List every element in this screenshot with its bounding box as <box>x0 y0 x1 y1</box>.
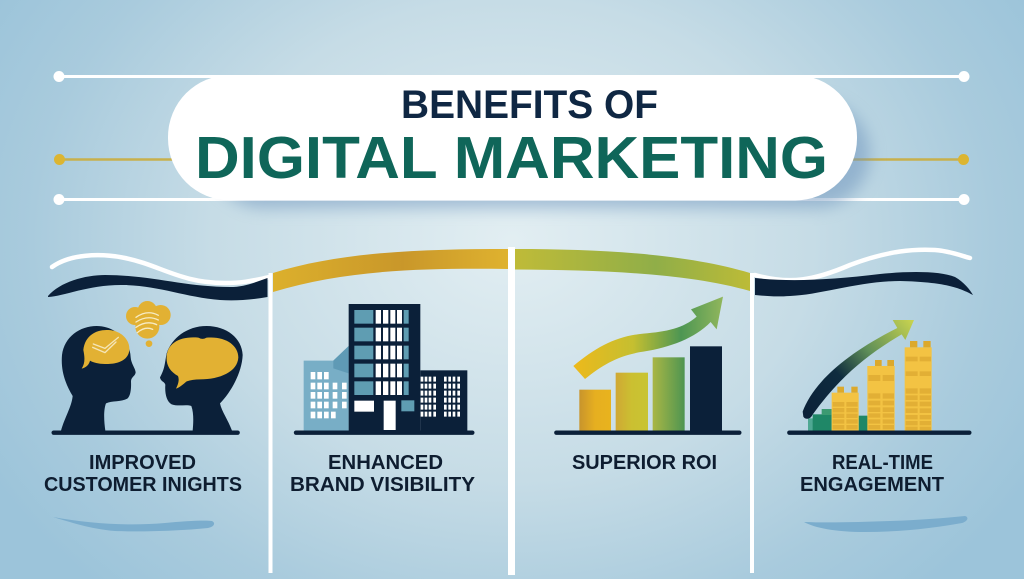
panel: improved customer insights icon <box>54 301 243 433</box>
title pill <box>168 75 857 200</box>
title pill shadow <box>210 100 870 208</box>
left head <box>61 326 136 431</box>
green arc band <box>515 249 750 291</box>
title line 1: BENEFITS OF <box>401 83 658 127</box>
tall navy tower <box>349 304 420 431</box>
label: improved customer insights <box>44 452 242 496</box>
column dividers <box>268 247 754 575</box>
gold arc band <box>273 249 508 292</box>
base line <box>556 426 739 439</box>
decorative line: middle gold <box>54 154 969 165</box>
title line 2: DIGITAL MARKETING <box>195 125 828 191</box>
swoosh: left <box>53 517 214 531</box>
label: superior ROI: SUPERIOR ROI <box>572 452 717 474</box>
decorative line: top white <box>54 71 970 82</box>
left speech bubble with check <box>82 330 129 369</box>
left pale building <box>304 346 349 431</box>
bar chart <box>579 346 722 431</box>
rising arrow <box>573 297 723 379</box>
right wave: white <box>755 250 970 280</box>
panel: real-time engagement icon <box>789 320 969 433</box>
right navy building <box>420 370 467 431</box>
green blocks <box>808 409 868 431</box>
panel: enhanced brand visibility icon <box>296 304 472 433</box>
label: real-time engagement <box>800 452 944 496</box>
decorative line: bottom white <box>54 194 970 205</box>
swoosh: right <box>804 516 967 532</box>
base line <box>789 426 969 439</box>
label: real-time engagement: ENGAGEMENT <box>800 474 944 496</box>
label: enhanced brand visibility: ENHANCED <box>328 452 443 474</box>
base line <box>54 426 238 439</box>
curved rising arrow <box>803 320 914 419</box>
right speech bubble <box>167 337 238 389</box>
label: improved customer insights: CUSTOMER INIGHTS <box>44 474 242 496</box>
gold stacks <box>832 341 932 431</box>
right wave: navy <box>755 272 973 296</box>
title <box>195 83 828 191</box>
base line <box>296 426 472 439</box>
right head <box>160 326 243 431</box>
label: enhanced brand visibility: BRAND VISIBILITY <box>290 474 476 496</box>
thought cloud <box>126 301 171 347</box>
panel: superior ROI icon <box>556 297 739 433</box>
left wave: white <box>52 255 270 283</box>
left wave: navy <box>48 275 268 300</box>
label: enhanced brand visibility <box>290 452 476 496</box>
label: real-time engagement: REAL-TIME <box>832 452 933 474</box>
label: improved customer insights: IMPROVED <box>89 452 196 474</box>
